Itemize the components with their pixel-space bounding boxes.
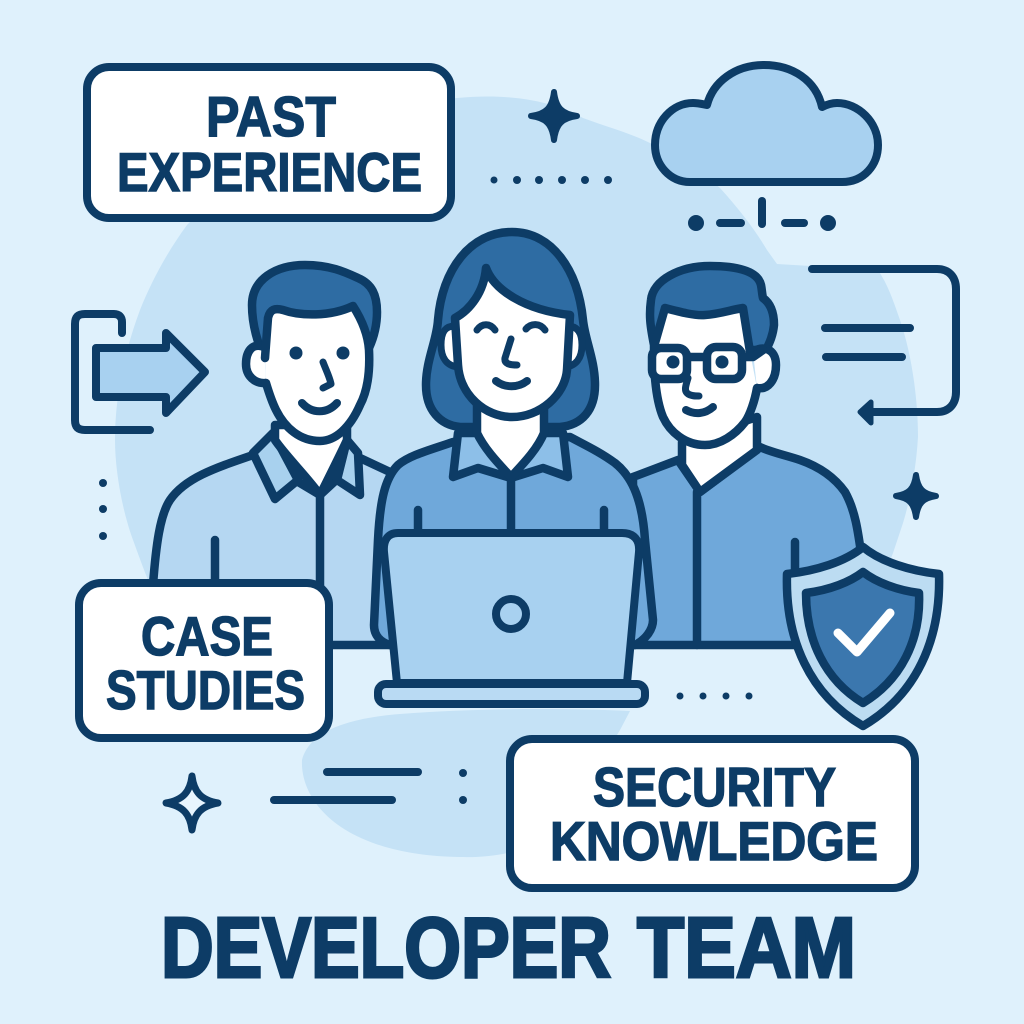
icon: arrow left — [75, 314, 205, 430]
dots: top — [490, 176, 612, 184]
dots: left — [99, 479, 107, 540]
dots: bottom — [676, 692, 752, 700]
right person hair — [650, 266, 774, 350]
centre person hair — [426, 232, 595, 427]
exit bracket — [75, 314, 150, 430]
label: case studies: CASE — [141, 605, 273, 667]
title: DEVELOPER — [161, 901, 611, 996]
right person face — [655, 308, 757, 445]
centre person collar left — [453, 433, 511, 478]
shield check — [838, 613, 890, 652]
label: security knowledge — [510, 739, 915, 888]
person: left — [153, 265, 392, 645]
centre person smile — [496, 381, 527, 386]
left person smile — [302, 403, 337, 411]
arrow shape — [96, 333, 205, 413]
left person hair — [252, 265, 377, 358]
dots: speed lines — [459, 769, 467, 804]
laptop screen — [384, 533, 639, 683]
label: past experience: PAST — [206, 85, 336, 149]
title: TEAM — [637, 901, 856, 996]
person: centre — [374, 232, 653, 645]
background blob: upper — [115, 96, 918, 645]
icon: sparkle right — [896, 475, 936, 517]
centre person shirt — [374, 437, 653, 645]
centre person collar right — [511, 433, 568, 478]
right person glasses — [652, 347, 763, 379]
shield inner — [806, 572, 919, 703]
left person ear — [246, 346, 266, 383]
icon: shield — [787, 547, 939, 726]
centre person ear right — [565, 326, 582, 367]
left person face — [265, 306, 369, 441]
right person shirt lines — [697, 492, 795, 645]
arrow head — [860, 402, 871, 423]
left person neck — [275, 425, 347, 495]
right person ear — [753, 348, 776, 388]
shield outer — [787, 547, 939, 726]
laptop base — [378, 684, 645, 704]
label: security knowledge: KNOWLEDGE — [550, 810, 878, 872]
icon: sparkle outline — [166, 776, 218, 830]
label: past experience — [87, 67, 451, 218]
centre person shirt lines — [418, 478, 604, 533]
icon: sparkle top — [531, 92, 577, 140]
label: case studies: STUDIES — [106, 659, 305, 721]
centre person face — [455, 268, 570, 417]
label: case studies — [79, 583, 329, 738]
right person nose — [685, 378, 699, 396]
left person collar right — [337, 440, 360, 495]
laptop — [378, 533, 645, 704]
left person shirt lines — [215, 495, 320, 645]
person: right — [633, 266, 862, 645]
network dashes — [692, 201, 832, 227]
left person collar left — [253, 433, 298, 499]
icon: cloud — [655, 65, 878, 182]
right person eyes — [666, 356, 728, 368]
centre person eyes — [477, 325, 545, 330]
speed lines — [274, 772, 418, 800]
label: past experience: EXPERIENCE — [117, 141, 422, 203]
text lines — [825, 328, 910, 357]
icon: return arrow right — [812, 269, 956, 423]
centre person neck — [477, 405, 544, 477]
background blob: lower — [302, 709, 630, 857]
return path — [812, 269, 956, 412]
laptop logo — [496, 599, 526, 629]
table line — [329, 642, 795, 648]
centre person nose — [505, 339, 517, 365]
right person smile — [686, 407, 713, 413]
right person shirt — [633, 447, 862, 645]
left person eyes — [290, 346, 350, 360]
left person nose — [323, 362, 331, 388]
right person neck — [682, 417, 757, 492]
centre person ear left — [441, 326, 458, 367]
left person shirt — [153, 455, 392, 645]
label: security knowledge: SECURITY — [593, 756, 836, 818]
